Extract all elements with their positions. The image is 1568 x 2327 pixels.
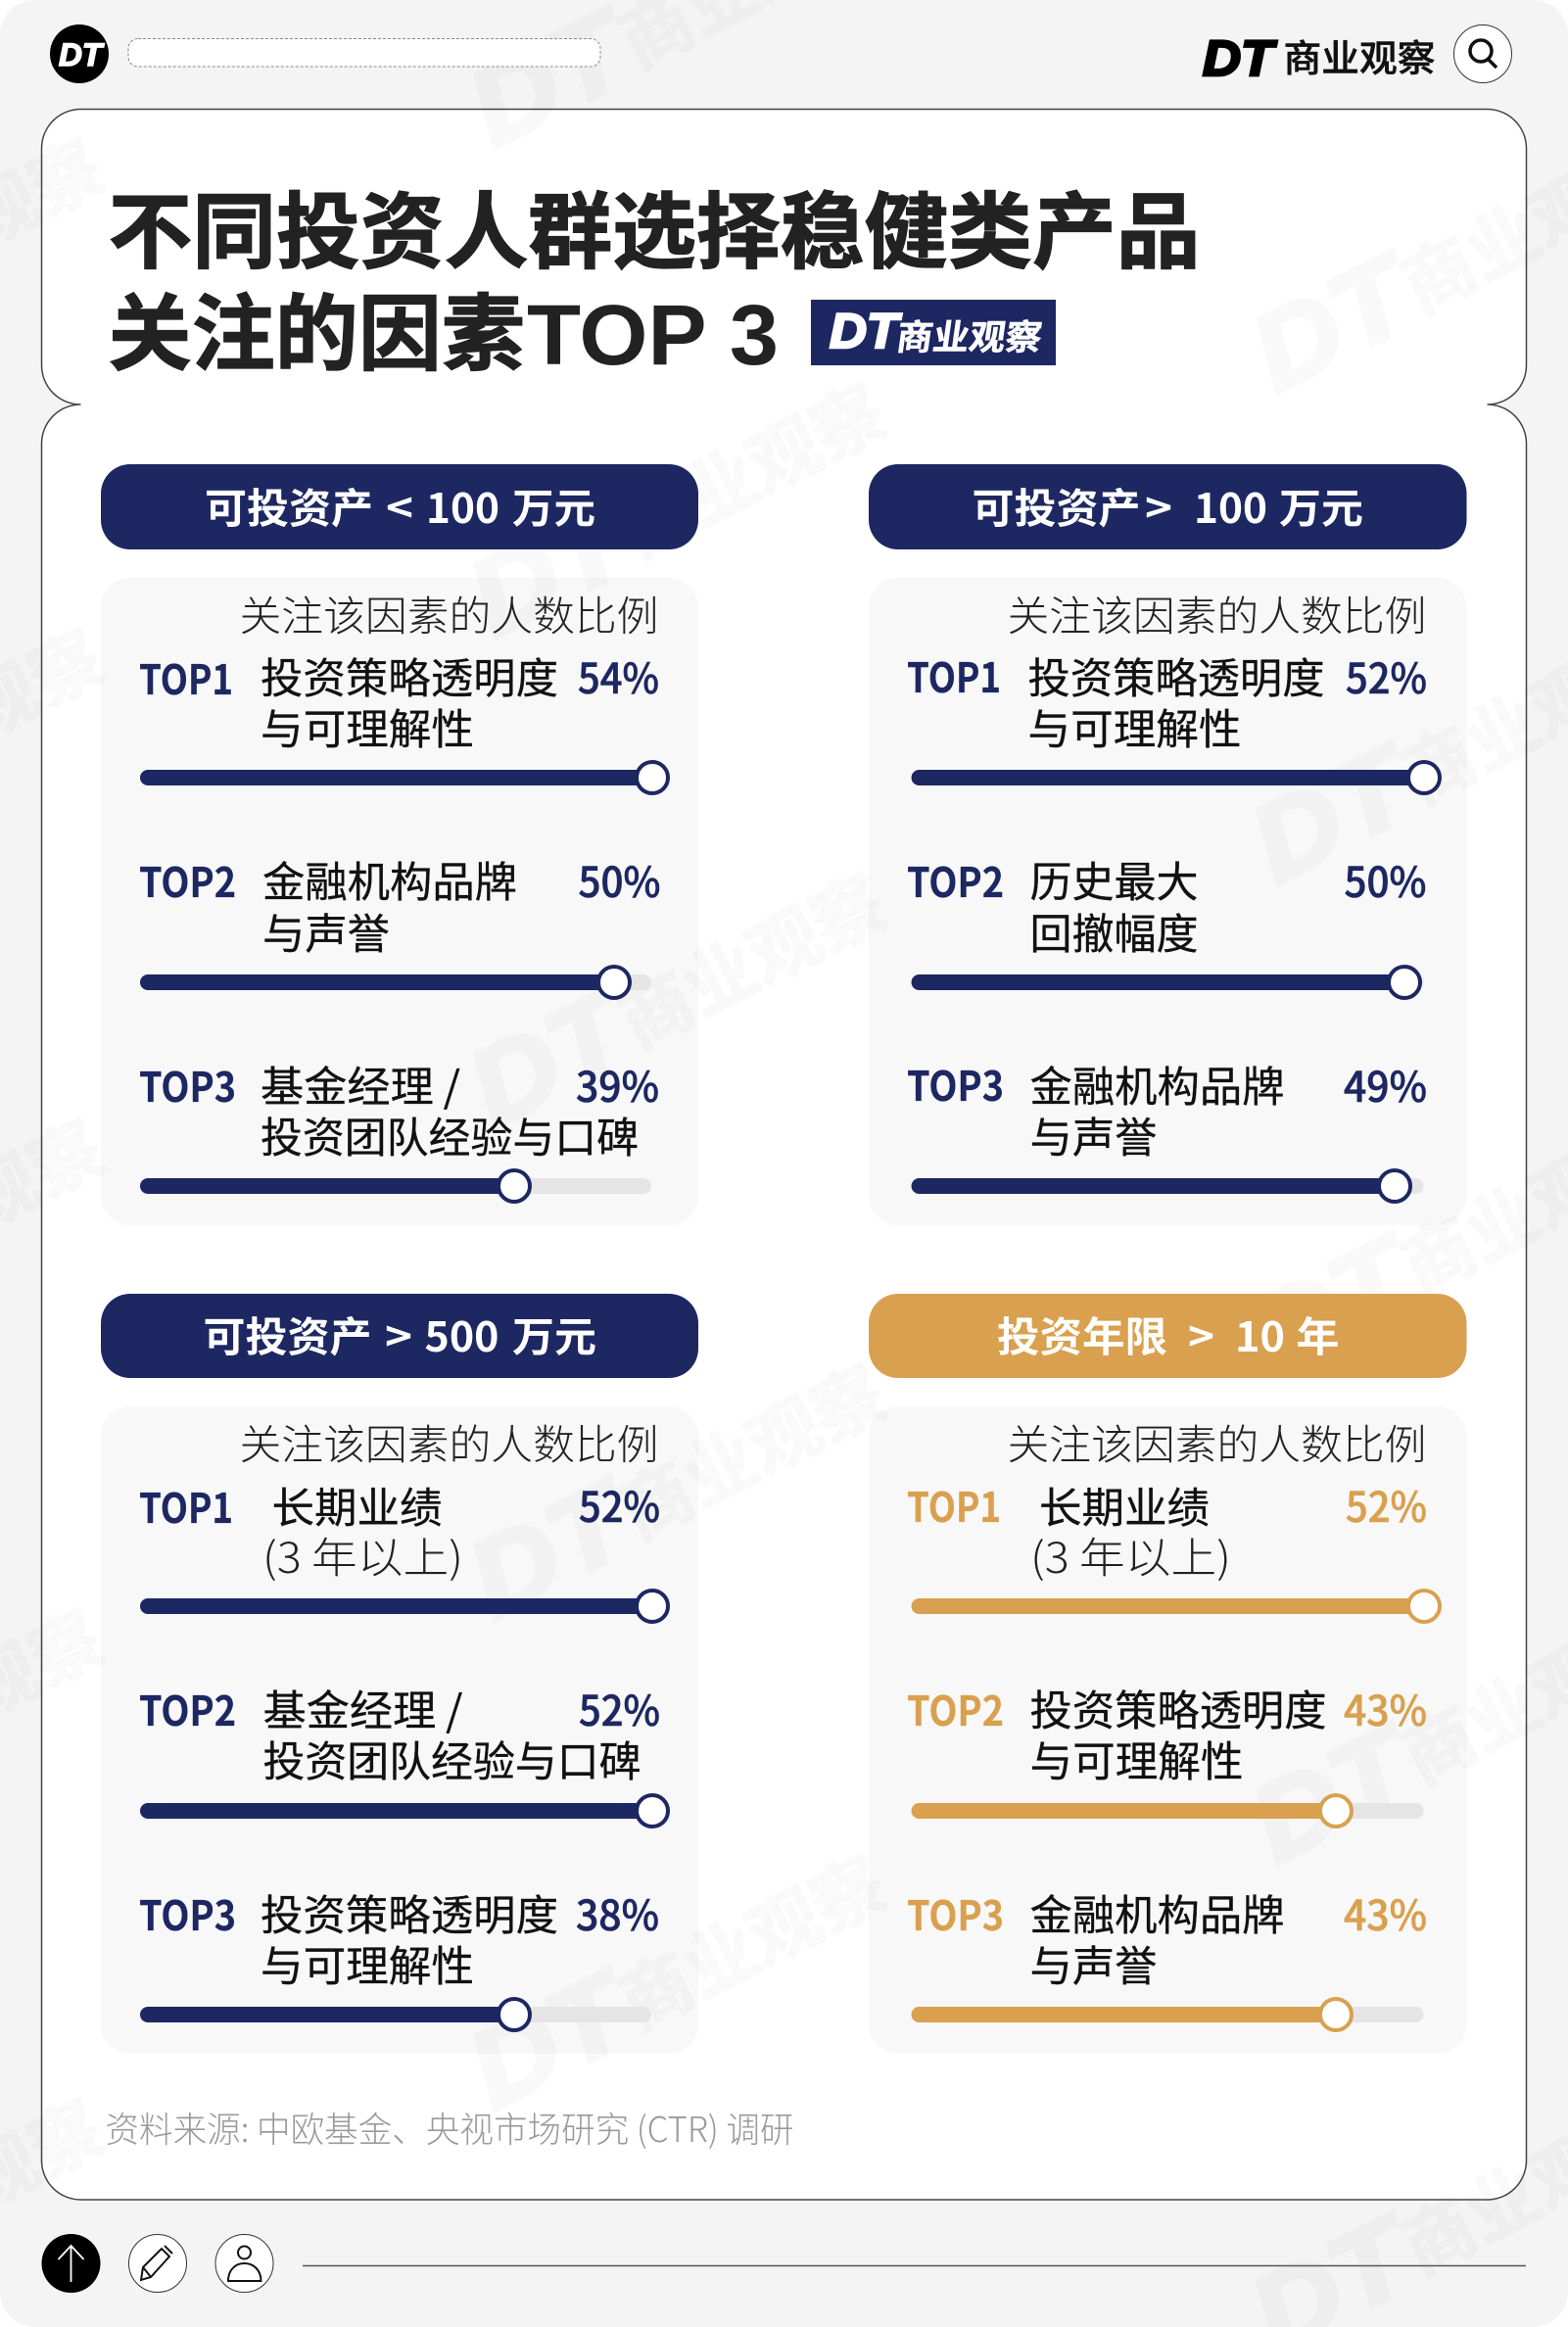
row: top 3: 金融机构品牌 <box>1030 1882 1285 1943</box>
row: top 1: TOP1 <box>139 1476 233 1536</box>
heading pill: 100 <box>426 476 499 536</box>
row: top 2: TOP2 <box>139 850 236 910</box>
brand logo: DT商业观察: DT <box>1203 30 1277 86</box>
heading pill: > <box>385 1305 412 1364</box>
row: top 2 <box>139 1678 668 1827</box>
row: top 1: 54% <box>578 645 659 706</box>
row: top 3: 49% <box>1344 1054 1427 1115</box>
row: top 3: 与声誉 <box>1030 1105 1158 1165</box>
row: top 1: TOP1 <box>907 1475 1001 1535</box>
row: top 3: TOP3 <box>139 1883 236 1943</box>
row: top 2: 投资策略透明度 <box>1030 1678 1326 1738</box>
icon: DT round logo <box>50 24 109 83</box>
icon: up arrow <box>41 2234 100 2293</box>
row: top 3: 39% <box>576 1054 659 1115</box>
watermark pattern: DT <box>450 476 654 659</box>
watermark pattern: 商业观察 <box>599 356 901 578</box>
icon: DT round logo: DT <box>59 37 105 72</box>
panel: assets below 1M <box>101 464 698 1202</box>
heading pill: 500 <box>425 1305 499 1364</box>
row: top 2 <box>907 1678 1427 1827</box>
row: top 2: 50% <box>578 849 660 910</box>
row: top 3: 投资策略透明度 <box>261 1882 558 1943</box>
row: top 1: 52% <box>1346 645 1427 706</box>
panel: assets above 5M <box>101 1294 698 2030</box>
row: top 2: 投资团队经验与口碑 <box>262 1729 641 1789</box>
row: top 1: 长期业绩 <box>1039 1475 1210 1536</box>
row: top 2: TOP2 <box>907 850 1004 910</box>
row: top 3: 投资团队经验与口碑 <box>261 1105 639 1165</box>
row: top 1: (3 年以上) <box>1030 1525 1231 1586</box>
brand badge: 商业观察 <box>893 309 1046 360</box>
row: top 3 <box>907 1882 1427 2030</box>
brand logo: DT商业观察: 商业观察 <box>1283 28 1436 82</box>
row: top 3: TOP3 <box>907 1883 1004 1943</box>
source note: 资料来源: 中欧基金、央视市场研究 (CTR) 调研 <box>106 2102 793 2153</box>
panel: assets over 1M background <box>869 578 1467 1225</box>
row: top 3: TOP3 <box>139 1055 236 1115</box>
icon: pencil <box>129 2235 186 2292</box>
title <box>108 166 1201 388</box>
icon: person <box>215 2235 273 2292</box>
row: top 2: 与可理解性 <box>1030 1729 1244 1789</box>
row: top 2 <box>139 849 660 998</box>
heading pill: 10 <box>1235 1305 1285 1364</box>
row: top 3: 基金经理 / <box>261 1054 460 1115</box>
brand logo: DT商业观察 <box>1203 28 1436 86</box>
heading pill: 万元 <box>512 476 595 536</box>
watermark pattern: 商业观察 <box>599 1337 901 1559</box>
heading pill: 年 <box>1297 1305 1340 1364</box>
row: top 1: (3 年以上) <box>262 1525 463 1586</box>
row: top 3: 与可理解性 <box>261 1933 474 1994</box>
panel: assets above 1M <box>869 464 1467 1202</box>
row: top 1 <box>139 645 668 793</box>
row: top 1 <box>139 1474 668 1622</box>
watermark pattern: DT <box>1232 231 1437 414</box>
row: top 3: 43% <box>1344 1882 1427 1943</box>
row: top 3: 与声誉 <box>1030 1933 1158 1994</box>
heading pill <box>101 464 698 549</box>
row: top 2: 与声誉 <box>262 901 390 962</box>
heading pill: > <box>1145 476 1172 536</box>
watermark pattern: DT <box>1232 722 1437 905</box>
watermark pattern: DT <box>1232 1212 1437 1396</box>
row: top 2: TOP2 <box>139 1679 236 1738</box>
watermark pattern: DT <box>450 1457 654 1640</box>
footer rule <box>303 2264 1526 2266</box>
row: top 1 <box>907 1474 1440 1622</box>
row: top 2: 历史最大 <box>1030 849 1199 910</box>
title: 不同投资人群选择稳健类产品 <box>108 166 1201 286</box>
row: top 1: 与可理解性 <box>261 696 474 757</box>
panel: assets under 1M background <box>101 578 698 1225</box>
heading pill: 可投资产 <box>972 476 1140 536</box>
heading pill: 万元 <box>1279 476 1363 536</box>
heading pill: 100 <box>1194 476 1267 536</box>
chart caption: 关注该因素的人数比例 <box>239 584 658 643</box>
title: TOP 3 <box>527 288 779 383</box>
row: top 2: 50% <box>1344 849 1426 910</box>
row: top 1: 与可理解性 <box>1028 696 1242 757</box>
row: top 2: 金融机构品牌 <box>262 849 517 910</box>
row: top 2 <box>907 849 1426 998</box>
row: top 1: 投资策略透明度 <box>261 645 558 706</box>
panel: investment years over 10 <box>869 1294 1467 2030</box>
watermark pattern: DT <box>450 1948 654 2131</box>
heading pill: 可投资产 <box>205 476 373 536</box>
chart caption: 关注该因素的人数比例 <box>1007 1412 1426 1472</box>
row: top 2: 43% <box>1344 1678 1427 1738</box>
row: top 1: 52% <box>579 1474 660 1535</box>
watermark pattern: DT <box>450 0 654 169</box>
watermark pattern: DT <box>1232 1702 1437 1885</box>
row: top 1: 投资策略透明度 <box>1028 645 1324 706</box>
watermark pattern: DT <box>450 967 654 1150</box>
heading pill <box>101 1294 698 1378</box>
row: top 3 <box>907 1054 1427 1202</box>
row: top 1: TOP1 <box>907 645 1001 705</box>
heading pill: 可投资产 <box>204 1305 372 1364</box>
heading pill <box>869 464 1467 549</box>
heading pill: 投资年限 <box>997 1305 1167 1364</box>
watermark pattern: 商业观察 <box>599 1828 901 2050</box>
heading pill: 万元 <box>512 1305 596 1364</box>
row: top 2: 52% <box>579 1678 660 1738</box>
row: top 3: TOP3 <box>907 1054 1004 1114</box>
watermark pattern: 商业观察 <box>599 846 901 1069</box>
panel: investment years background <box>869 1406 1467 2054</box>
chart caption: 关注该因素的人数比例 <box>1007 584 1426 643</box>
icon: search <box>1453 25 1512 82</box>
search bar <box>128 39 600 67</box>
row: top 3: 金融机构品牌 <box>1030 1054 1285 1115</box>
row: top 3 <box>139 1054 659 1202</box>
heading pill: > <box>1188 1305 1214 1364</box>
row: top 1: 长期业绩 <box>272 1475 443 1536</box>
title: 关注的因素 <box>108 267 525 388</box>
row: top 2: TOP2 <box>907 1679 1004 1738</box>
heading pill <box>869 1294 1467 1378</box>
row: top 1: 52% <box>1346 1474 1427 1535</box>
brand badge: DT <box>830 304 903 358</box>
row: top 3: 38% <box>576 1882 659 1943</box>
panel: assets over 5M background <box>101 1406 698 2054</box>
brand badge <box>811 300 1056 365</box>
row: top 1 <box>907 645 1440 793</box>
row: top 1: TOP1 <box>139 647 233 707</box>
row: top 2: 基金经理 / <box>262 1678 463 1738</box>
row: top 3 <box>139 1882 659 2030</box>
heading pill: < <box>386 476 413 536</box>
row: top 2: 回撤幅度 <box>1030 901 1199 962</box>
chart caption: 关注该因素的人数比例 <box>239 1412 658 1472</box>
